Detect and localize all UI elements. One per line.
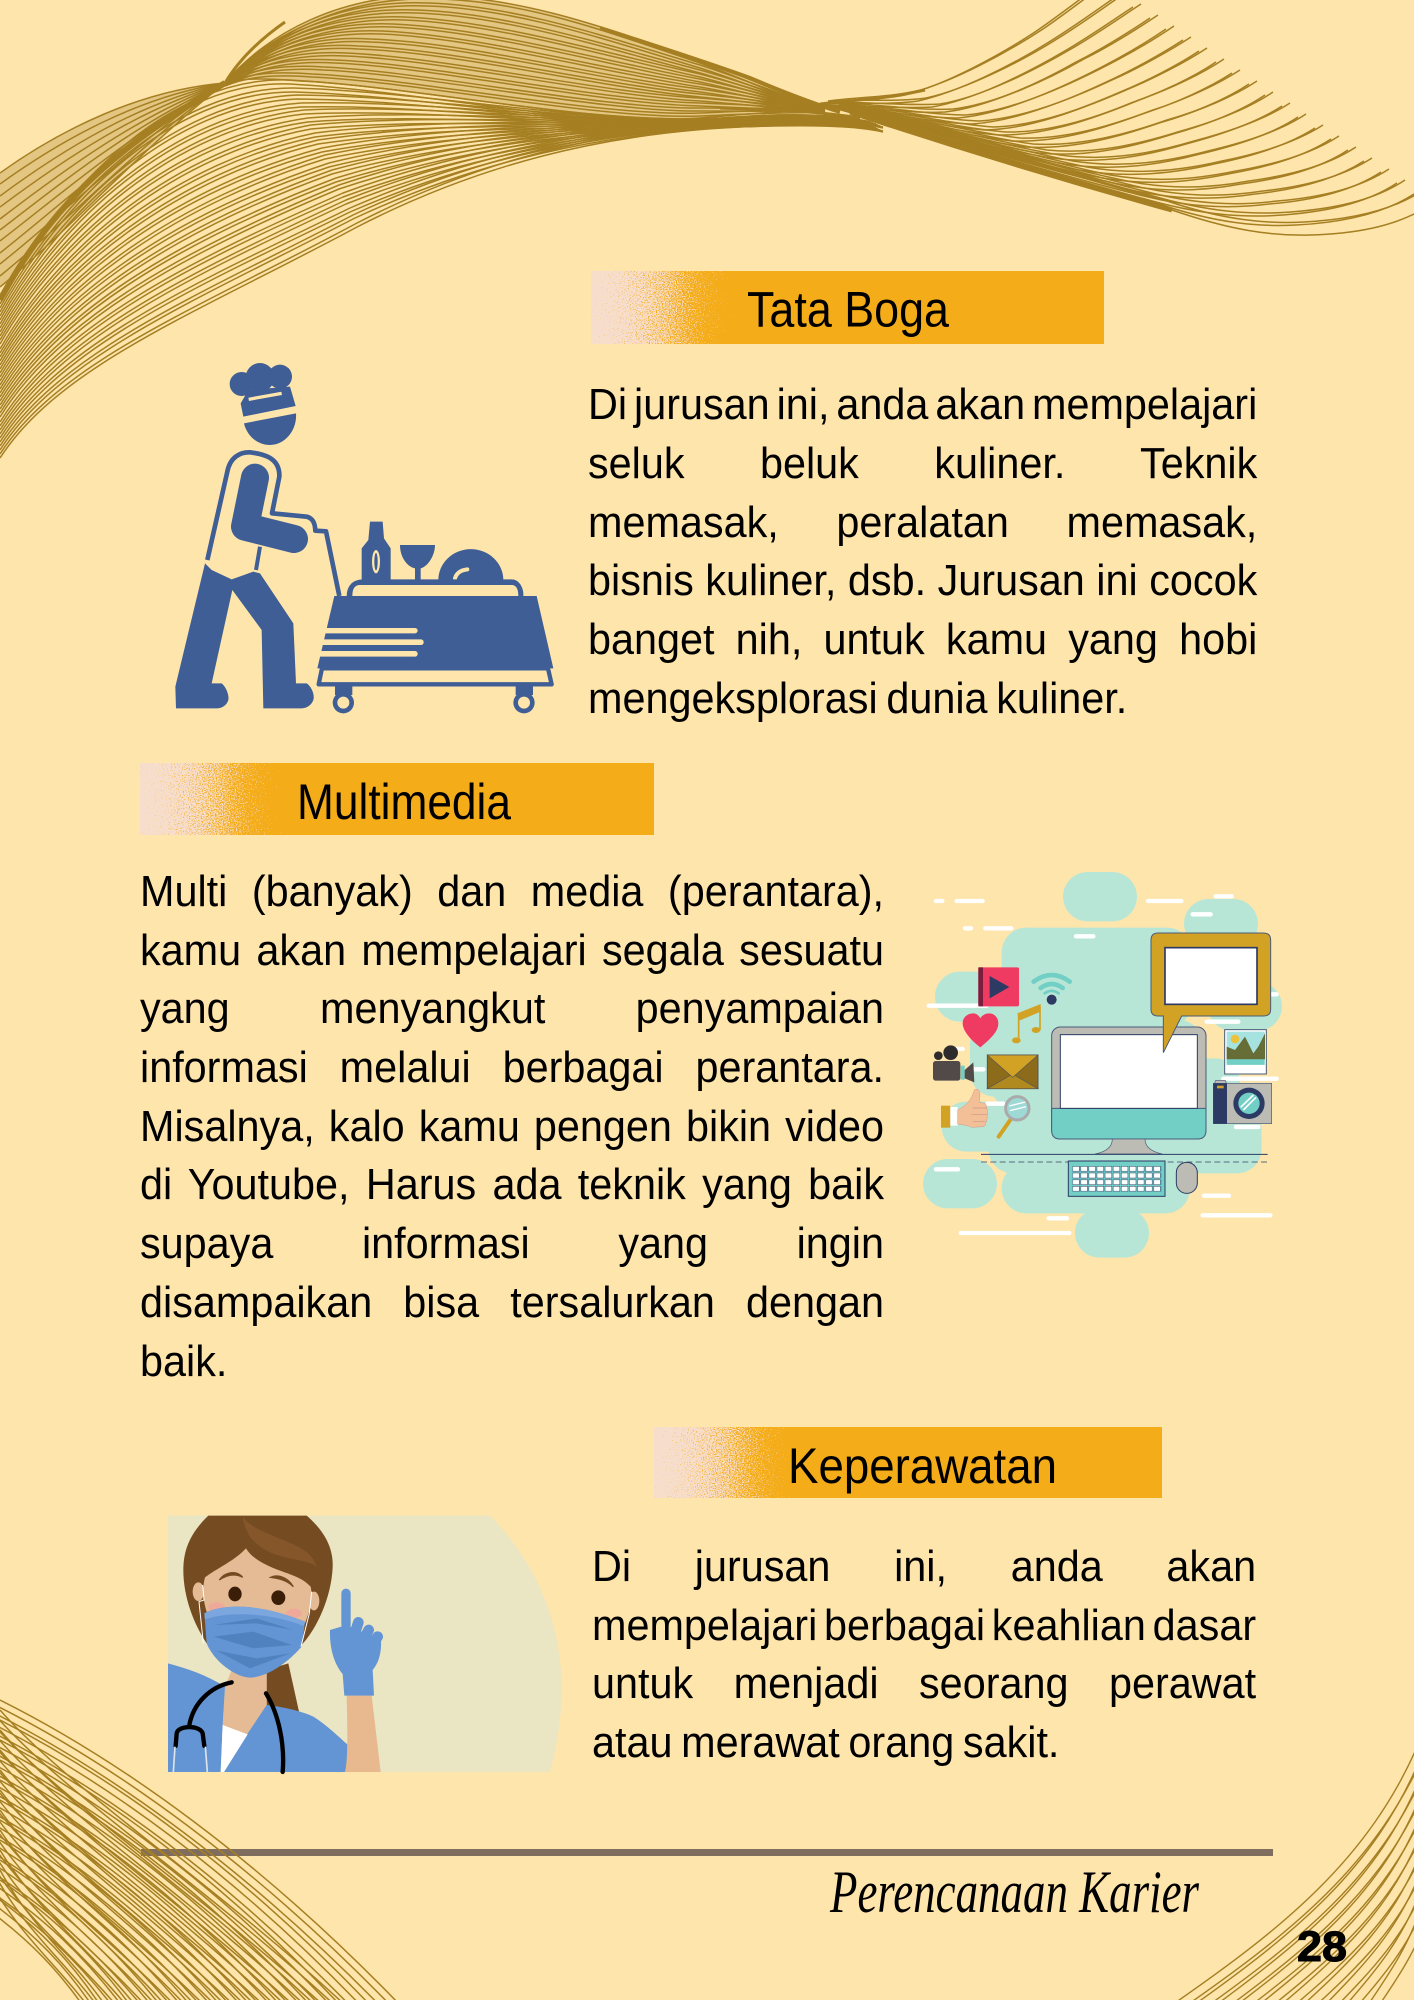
text block: Multimedia description: Multi (banyak) dan media (perantara), — [140, 867, 884, 916]
decorative wave: top ribbons — [0, 0, 1414, 458]
footer rule — [141, 1849, 1273, 1856]
heading bar: Tata Boga: Tata Boga — [747, 282, 949, 338]
text block: Multimedia description: kamu akan mempelajari segala sesuatu — [140, 926, 884, 975]
text block: Keperawatan description — [592, 1542, 1256, 1767]
text block: Tata Boga description: memasak, peralatan memasak, — [588, 498, 1257, 547]
heading bar: Keperawatan — [654, 1427, 1162, 1498]
text block: Tata Boga description: bisnis kuliner, dsb. Jurusan ini cocok — [588, 556, 1257, 605]
text block: Multimedia description: informasi melalui berbagai perantara. — [140, 1043, 884, 1092]
text block: Keperawatan description: untuk menjadi seorang perawat — [592, 1659, 1256, 1708]
text block: Tata Boga description: Di jurusan ini, anda akan mempelajari — [588, 380, 1257, 429]
text block: Multimedia description: supaya informasi yang ingin — [140, 1219, 884, 1268]
heading bar: Tata Boga — [591, 271, 1104, 344]
text block: Tata Boga description: mengeksplorasi dunia kuliner. — [588, 674, 1127, 723]
illustration: nurse with mask pointing up — [168, 1516, 562, 1772]
icon: chef pushing food cart — [175, 363, 553, 713]
text block: Multimedia description: yang menyangkut penyampaian — [140, 984, 884, 1033]
text block: Keperawatan description: atau merawat orang sakit. — [592, 1718, 1059, 1767]
text block: Keperawatan description: Di jurusan ini, anda akan — [592, 1542, 1256, 1591]
text block: Tata Boga description: banget nih, untuk kamu yang hobi — [588, 615, 1257, 664]
footer title: Perencanaan Karier: Perencanaan Karier — [829, 1859, 1199, 1925]
illustration: multimedia computer and media icons — [923, 872, 1282, 1258]
text block: Tata Boga description: seluk beluk kuliner. Teknik — [588, 439, 1257, 488]
decorative wave: bottom-left lines — [0, 1700, 400, 2000]
heading bar: Multimedia — [140, 763, 654, 835]
text block: Multimedia description: disampaikan bisa tersalurkan dengan — [140, 1278, 884, 1327]
text block: Multimedia description: baik. — [140, 1336, 227, 1386]
text block: Tata Boga description — [588, 380, 1258, 723]
text block: Multimedia description: Misalnya, kalo kamu pengen bikin video — [140, 1102, 884, 1151]
text block: Multimedia description — [140, 867, 884, 1386]
text block: Keperawatan description: mempelajari berbagai keahlian dasar — [592, 1601, 1256, 1650]
heading bar: Multimedia: Multimedia — [297, 774, 511, 830]
text block: Multimedia description: di Youtube, Harus ada teknik yang baik — [140, 1160, 884, 1209]
heading bar: Keperawatan: Keperawatan — [788, 1438, 1057, 1494]
page number: 28 — [1297, 1923, 1347, 1971]
decorative wave: bottom-right lines — [1172, 1740, 1414, 2000]
